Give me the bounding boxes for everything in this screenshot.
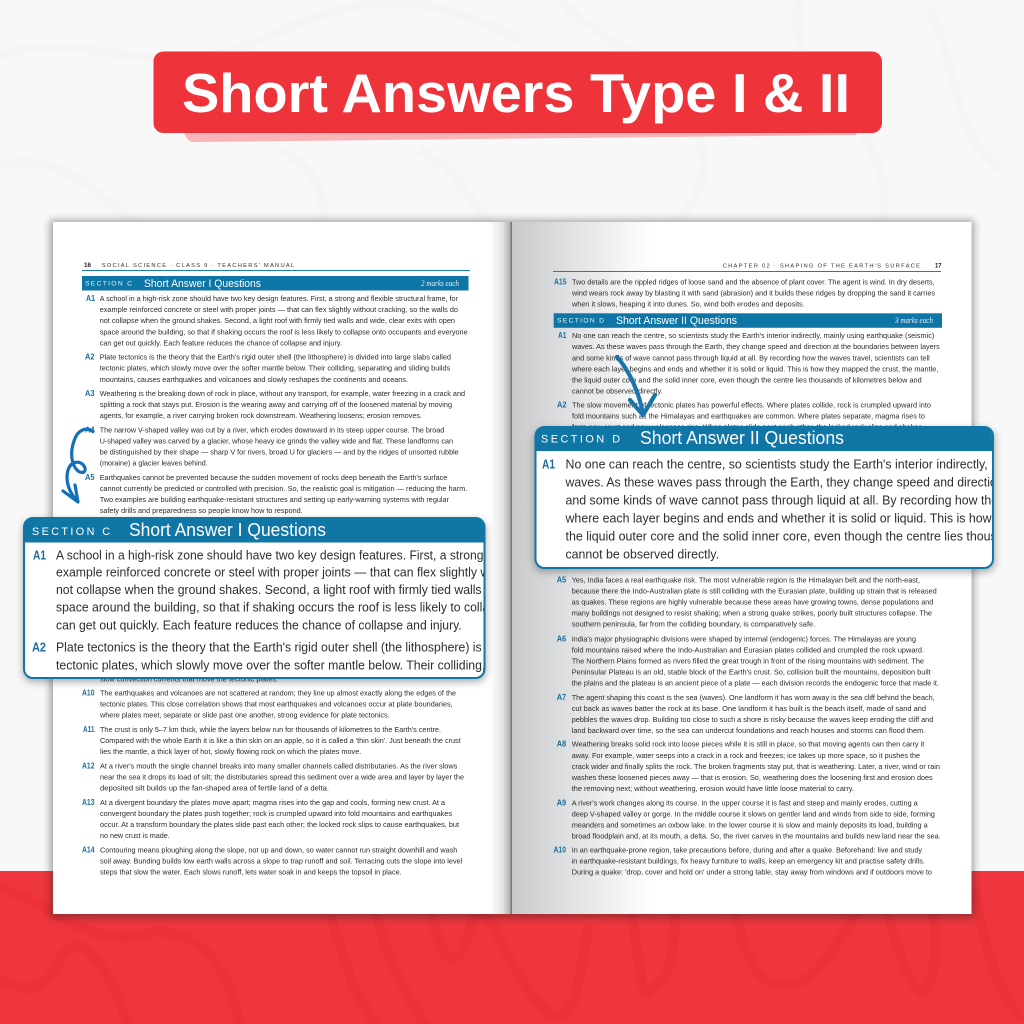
answer A7: The agent shaping this coast is the sea (waves). One landform it has worn away is the sea cliff behind the beach, [572, 693, 935, 702]
section D bar [554, 313, 942, 328]
title text: Short Answers Type I & II [182, 62, 850, 124]
answer A4 [85, 426, 459, 468]
answer A2 right: form new crust and new volcanoes rise. When plates slide past each other, the locked rock slips and shakes [572, 423, 922, 432]
answer A3: A3 [85, 389, 95, 398]
answer A6: Peninsular Plateau is an old, stable block of the Earth's crust. So, collision built the mountains, deposition built [572, 667, 932, 676]
answer A1 right: and some kinds of wave cannot pass through liquid at all. By recording how the waves travel, scientists can tell [572, 353, 930, 362]
running head left: SOCIAL SCIENCE · CLASS 9 · TEACHERS' MANUAL [102, 263, 295, 269]
answer A2 right: fold mountains such as the Himalayas and earthquakes are common. Where plates separate, magma rises to [572, 412, 925, 421]
callout D answer A1 [542, 456, 1024, 562]
answer A15 [554, 277, 935, 308]
answer A9: meanders and sometimes an oxbow lake. In the lower course it is slow and mainly deposits its load, building a [572, 820, 928, 829]
answer A3 [85, 389, 465, 420]
answer A5 right: Yes, India faces a real earthquake risk. The most vulnerable region is the Himalayan belt and the north-east, [572, 575, 920, 584]
answer A11: A11 [83, 725, 95, 734]
answer A2 right: A2 [557, 401, 567, 410]
page number 17: 17 [935, 262, 942, 269]
running head right: CHAPTER 02 · SHAPING OF THE EARTH'S SURFACE [723, 263, 920, 269]
answer A10 left: tectonic plates. This close correlation shows that most earthquakes and volcanoes occur at plate boundaries, [100, 700, 453, 709]
answer A4: U-shaped valley was carved by a glacier, whose heavy ice grinds the valley wide and flat. These landforms can [100, 437, 453, 446]
answer A13: no new crust is made. [100, 831, 170, 840]
answer A1 right [558, 331, 940, 395]
answer A2: mountains, causes earthquakes and volcanoes and slowly reshapes the continents and oceans. [100, 375, 408, 384]
left page content [82, 262, 470, 877]
section D bar: SECTION D [557, 318, 604, 325]
callout C answer A2: tectonic plates, which slowly move over the softer mantle below. Their colliding, separating and sliding builds [56, 657, 644, 672]
answer A1 [86, 294, 468, 347]
answer A4: The narrow V-shaped valley was cut by a river, which erodes downward in its steep upper course. The broad [100, 426, 444, 435]
answer A4: be distinguished by their shape — sharp V for rivers, broad U for glaciers — and by the ridges of unsorted rubble [100, 448, 459, 457]
answer A1 right: No one can reach the centre, so scientists study the Earth's interior indirectly, mainly using earthquake (seismic) [572, 331, 935, 340]
section D bar: Short Answer II Questions [616, 315, 737, 327]
answer A5 right: southern peninsula, far from the colliding boundary, is comparatively safe. [572, 620, 815, 629]
right page content [553, 262, 942, 877]
partial answer line under callout: slow convection currents that move the tectonic plates. [100, 674, 278, 684]
answer A5 right: many buildings not designed to resist shaking; when a strong quake strikes, poorly built structures collapse. The [572, 609, 932, 618]
answer A14: soil away. Bunding builds low earth walls across a slope to trap runoff and soil. Terracing cuts the slope into level [100, 857, 463, 866]
callout C header: Short Answer I Questions [129, 520, 326, 540]
answer A7: A7 [557, 693, 567, 702]
callout C answer A1: example reinforced concrete or steel with proper joints — that can flex slightly without cracking, so the walls do [56, 565, 656, 580]
arrow: to section D callout [617, 357, 655, 415]
answer A9 [557, 798, 941, 840]
answer A6 [557, 634, 939, 687]
callout: section D zoom [534, 426, 1024, 572]
answer A7: land backward over time, so the sea can undercut foundations and reach houses and storms can flood them. [572, 726, 925, 735]
answer A10 left: The earthquakes and volcanoes are not scattered at random; they line up almost exactly along the edges of the [100, 689, 456, 698]
answer A5 right: A5 [557, 575, 567, 584]
callout C answer A1: A school in a high-risk zone should have two key design features. First, a strong and flexible structural frame, for [56, 547, 657, 562]
answer A5 [85, 473, 467, 515]
section D bar: 3 marks each [894, 316, 933, 325]
callout D content [534, 426, 1024, 562]
answer A8: crack wider and finally splits the rock. The broken fragments stay put, that is weathering. Later, a river, wind or rain [572, 762, 940, 771]
answer A13: At a divergent boundary the plates move apart; magma rises into the gap and cools, forming new crust. At a [100, 798, 446, 807]
answer A10 left: where plates meet, separate or slide past one another, strong evidence for plate tectonics. [99, 711, 390, 720]
section C bar [82, 276, 468, 290]
left page sheet [53, 222, 511, 914]
callout C answer A2: A2 [32, 640, 46, 655]
answer A10 right: in earthquake-resistant buildings, fix heavy furniture to walls, keep an emergency kit and practise safety drills. [572, 857, 925, 866]
section C bar: Short Answer I Questions [144, 278, 261, 290]
answer A5 right: because there the Indo-Australian plate is still colliding with the Eurasian plate, building up strain that is released [572, 586, 937, 595]
answer A15: wind wears rock away by blasting it with sand (abrasion) and it builds these ridges by dropping the sand it carries [571, 288, 935, 297]
answer A10 right [554, 846, 932, 877]
answer A4: (moraine) a glacier leaves behind. [100, 459, 208, 468]
callout C answer A1: space around the building, so that if shaking occurs the roof is less likely to collapse onto occupants and everyone [56, 600, 673, 615]
callout D header [534, 426, 995, 451]
callout: section C zoom [18, 515, 491, 687]
answer A11: Compared with the whole Earth it is like a thin skin on an apple, so it is called a 'thin skin'. Just beneath the crust [100, 736, 462, 745]
answer A6: the plains and the plateau is an ancient piece of a plate — each division records the endogenic force that made it. [572, 678, 939, 687]
answer A5 right [557, 575, 937, 629]
answer A14: steps that slow the water. Each slows runoff, lets water soak in and keeps the topsoil in place. [100, 868, 402, 877]
section C bar: 2 marks each [421, 279, 459, 288]
callout C header: SECTION C [32, 526, 110, 538]
answer A15: when it slows, heaping it into dunes. So, wind both erodes and deposits. [571, 299, 805, 308]
callout C answer A1: can get out quickly. Each feature reduces the chance of collapse and injury. [56, 617, 462, 632]
banner drop shadow [184, 133, 857, 142]
answer A10 left [82, 689, 456, 720]
answer A1 right: waves. As these waves pass through the Earth, they change speed and direction at the boundaries between layers [571, 342, 940, 351]
page number 16: 16 [84, 262, 91, 269]
right page gutter shading [512, 222, 652, 914]
answer A2: tectonic plates, which slowly move over the softer mantle below. Their colliding, separating and sliding builds [100, 364, 450, 373]
answer A13: A13 [82, 798, 95, 807]
answer A2 right [557, 401, 931, 432]
answer A7 [557, 693, 935, 735]
answer A6: A6 [557, 634, 567, 643]
answer A1: not collapse when the ground shakes. Second, a light roof with firmly tied walls and wide, clear exits with open [100, 316, 455, 325]
right page [510, 222, 972, 914]
left page [53, 222, 511, 914]
answer A10 left: A10 [82, 689, 95, 698]
answer A6: The Northern Plains formed as rivers filled the great trough in front of the rising mountains with sediment. The [572, 656, 924, 665]
answer A15: A15 [554, 277, 567, 286]
answer A14 [82, 846, 463, 877]
answer A9: A river's work changes along its course. In the upper course it is fast and steep and mainly erodes, cutting a [572, 798, 918, 807]
callout D answer A1: A1 [542, 456, 555, 471]
callout C answer A1: A1 [33, 547, 46, 562]
title banner [154, 52, 882, 142]
answer A14: A14 [82, 846, 95, 855]
answer A11 [83, 725, 462, 756]
answer A1 right: A1 [558, 331, 567, 340]
callout D header: Short Answer II Questions [640, 428, 844, 448]
callout C shadow [23, 520, 486, 682]
answer A1: can get out quickly. Each feature reduces the chance of collapse and injury. [100, 338, 342, 347]
callout D body [536, 427, 993, 568]
answer A8: A8 [557, 740, 567, 749]
answer A13: convergent boundary the plates push together; rock is crumpled upward into fold mountains and earthquakes [100, 809, 452, 818]
answer A3: splitting a rock that stays put. Erosion is the wearing away and carrying off of the loosened material by moving [100, 400, 452, 409]
answer A2 right: The slow movement of tectonic plates has powerful effects. Where plates collide, rock is crumpled upward into [572, 401, 931, 410]
answer A11: lies the mantle, a thick layer of hot, slowly flowing rock on which the plates move. [100, 747, 361, 756]
answer A5: safety drills and preparedness so people know how to respond. [100, 506, 303, 515]
answer A1 right: where each layer begins and ends and whether it is solid or liquid. This is how they mapped the crust, the mantle, [571, 364, 938, 373]
answer A14: Contouring means ploughing along the slope, not up and down, so water cannot run straight downhill and wash [100, 846, 457, 855]
answer A9: A9 [557, 798, 567, 807]
answer A3: Weathering is the breaking down of rock in place, without any transport, for example, water freezing in a crack and [100, 389, 465, 398]
answer A9: broad floodplain and, at its mouth, a delta. So, the river carves in the mountains and builds new land near the sea. [572, 831, 941, 840]
answer A8 [557, 740, 940, 793]
answer A10 right: A10 [554, 846, 566, 855]
answer A13: occur. At a transform boundary the plates slide past each other; the locked rock slips to cause earthquakes, but [100, 820, 460, 829]
answer A7: cut back as waves batter the rock at its base. One landform it has built is the beach itself, made of sand and [572, 704, 926, 713]
answer A6: India's major physiographic divisions were shaped by internal (endogenic) forces. The Himalayas are young [572, 634, 916, 643]
answer A12: near the sea it drops its load of silt; the distributaries spread this sediment over a wide area and layer by layer the [100, 773, 464, 782]
callout C content [25, 519, 484, 672]
answer A11: The crust is only 5–7 km thick, while the layers below run for thousands of kilometres to the Earth's centre. [100, 725, 441, 734]
answer A6: fold mountains raised where the Indo-Australian and Eurasian plates collided and crumpled the rock upward. [572, 645, 924, 654]
callout C answer A1 [33, 550, 484, 632]
answer A8: away. For example, water seeps into a crack in a rock and freezes; ice takes up more space, so it pushes the [572, 751, 920, 760]
section C bar: SECTION C [85, 281, 132, 288]
book page shadow [50, 220, 974, 918]
callout C body [24, 518, 484, 678]
answer A15: Two details are the rippled ridges of loose sand and the absence of plant cover. The agent is wind. In dry deserts, [572, 277, 935, 286]
answer A2: Plate tectonics is the theory that the Earth's rigid outer shell (the lithosphere) is divided into large slabs called [100, 353, 451, 362]
callout C answer A2: Plate tectonics is the theory that the Earth's rigid outer shell (the lithosphere) is divided into large slabs called [56, 640, 645, 655]
answer A1: space around the building, so that if shaking occurs the roof is less likely to collapse onto occupants and everyone [100, 327, 468, 336]
answer A8: washes these loosened pieces away — that is erosion. So, weathering does the loosening first and erosion does [571, 773, 933, 782]
answer A5 right: as quakes. These regions are highly vulnerable because these areas have growing towns, dense populations and [572, 598, 933, 607]
answer A4: A4 [85, 426, 95, 435]
callout C answer A1: not collapse when the ground shakes. Second, a light roof with firmly tied walls and wide, clear exits with open [56, 582, 652, 597]
left page gutter shading [490, 222, 511, 914]
right page sheet [512, 222, 972, 914]
answer A8: the removing next; without weathering, erosion would have little loose material to carry. [572, 784, 854, 793]
answer A1: example reinforced concrete or steel with proper joints — that can flex slightly without cracking, so the walls do [100, 305, 458, 314]
arrow: curled arrow to section C callout [63, 429, 93, 502]
answer A10 right: During a quake: 'drop, cover and hold on' under a strong table, stay away from windows and if outdoors move to [572, 868, 932, 877]
answer A12: deposited silt builds up the fan-shaped area of fertile land of a delta. [100, 784, 329, 793]
answer A10 right: In an earthquake-prone region, take precautions before, during and after a quake. Beforehand: live and study [572, 846, 922, 855]
answer A5: cannot currently be predicted or controlled with precision. So, the realistic goal is mitigation — reducing the harm. [100, 484, 467, 493]
callout D header: SECTION D [541, 434, 620, 446]
answer A2 [85, 353, 451, 384]
answer A1 right: cannot be observed directly. [572, 386, 663, 395]
answer A12 [82, 762, 464, 793]
answer A1 right: the liquid outer core and the solid inner core, even though the centre lies thousands of kilometres below and [572, 375, 922, 384]
callout C header [23, 517, 486, 542]
answer A5: Two examples are building earthquake-resistant structures and setting up early-warning systems with regular [100, 495, 449, 504]
answer A2: A2 [85, 353, 95, 362]
answer A9: deep V-shaped valley or gorge. In the middle course it slows on gentler land and winds from side to side, forming [572, 809, 935, 818]
callout C answer A2 [32, 642, 484, 672]
answer A1: A school in a high-risk zone should have two key design features. First, a strong and flexible structural frame, for [100, 294, 458, 303]
answer A5: A5 [85, 473, 95, 482]
answer A12: A12 [82, 762, 95, 771]
answer A3: agents, for example, a river carrying broken rock downstream. Weathering loosens; erosion removes. [100, 411, 422, 420]
callout D shadow [534, 429, 995, 572]
answer A13 [82, 798, 460, 840]
background: red lower band [0, 871, 1024, 1024]
callout D answer A1: cannot be observed directly. [566, 547, 719, 562]
answer A8: Weathering breaks solid rock into loose pieces while it is still in place, so that moving agents can then carry it [572, 740, 925, 749]
banner plate [154, 52, 882, 133]
answer A5: Earthquakes cannot be prevented because the sudden movement of rocks deep beneath the Earth's surface [100, 473, 447, 482]
answer A7: pebbles the waves drop. Building too close to such a shore is risky because the waves keep eroding the cliff and [572, 715, 933, 724]
answer A12: At a river's mouth the single channel breaks into many smaller channels called distributaries. As the river slows [100, 762, 457, 771]
answer A1: A1 [86, 294, 95, 303]
